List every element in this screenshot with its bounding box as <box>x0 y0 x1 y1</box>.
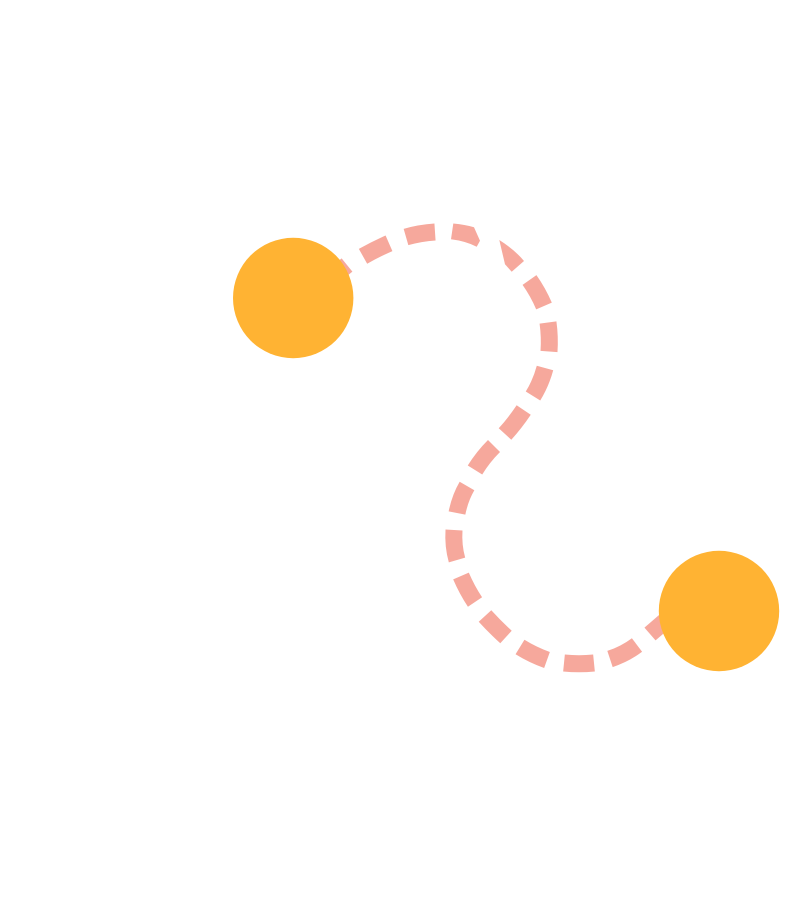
icon: end circle <box>659 551 779 671</box>
arrow: dashed S-curve path <box>336 224 672 664</box>
icon: start circle <box>233 238 353 358</box>
